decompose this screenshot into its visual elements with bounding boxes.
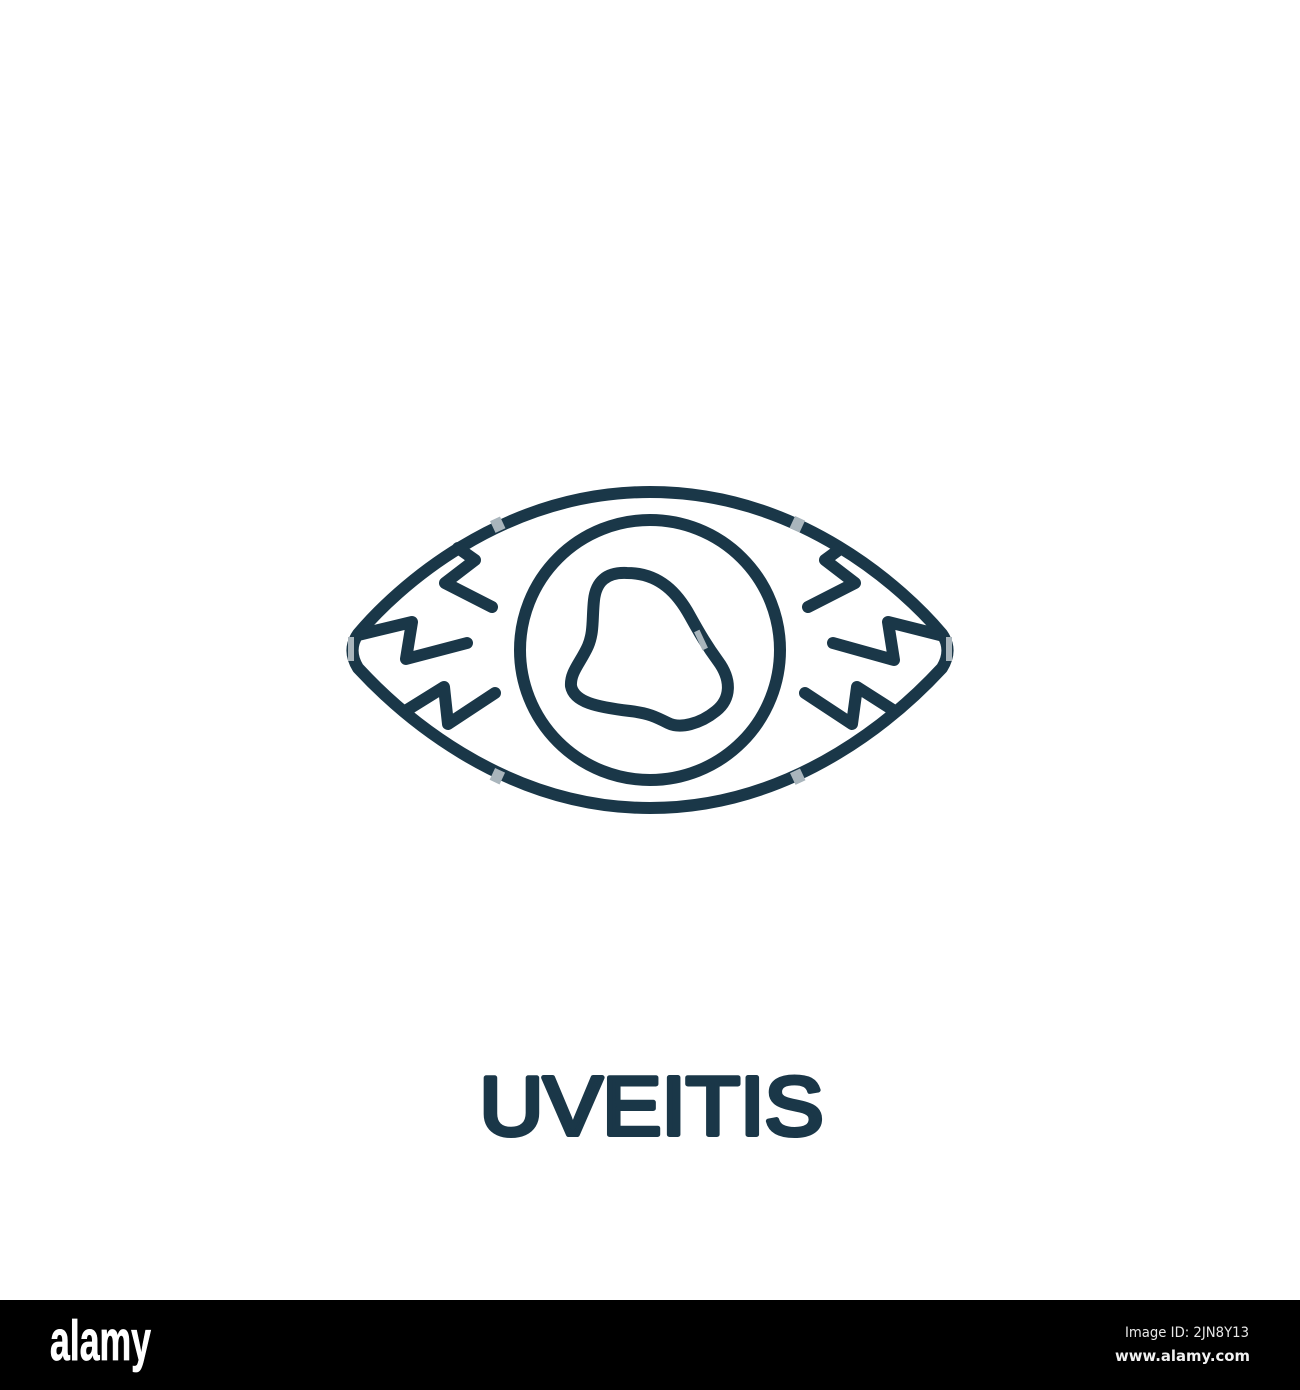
logo: alamy: alamy (50, 1309, 151, 1373)
watermark fragments (348, 516, 952, 785)
blood vessels right (805, 549, 940, 724)
website: www.alamy.com (1115, 1347, 1250, 1365)
irregular pupil (571, 573, 728, 726)
iris circle (520, 520, 780, 780)
title: UVEITIS (480, 1060, 824, 1152)
footer bar (0, 1300, 1300, 1390)
image id: Image ID: 2JN8Y13 (1125, 1325, 1249, 1341)
eye outline (352, 492, 948, 808)
blood vessels left (358, 548, 495, 724)
icon: inflamed eye (352, 492, 948, 808)
